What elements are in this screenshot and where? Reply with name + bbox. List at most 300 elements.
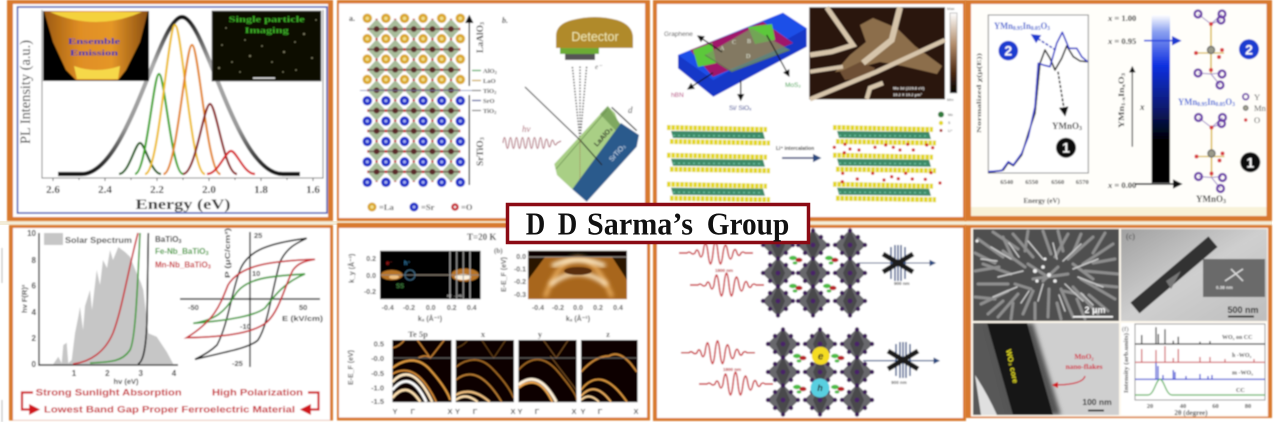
ARPES map a axes text: 0.2 [366,256,376,263]
crystal bottom [766,327,874,417]
XRD x ticks: 40 [1180,403,1186,410]
band panel titles: x [481,329,486,339]
composition formula: 3 [1121,73,1127,76]
lattice: Sr atoms [358,90,470,192]
ARPES map a axes text: 0.4 [467,305,477,312]
ARPES map a [379,250,482,300]
XRD trace: h-WO3 [1135,346,1265,362]
panel: perovskite upconversion [653,225,966,421]
legend: solar spectrum: Solar Spectrum [65,236,132,245]
loop: Fe-Nb [193,274,305,323]
badge 1: 1 [1246,154,1254,170]
k-path labels: Γ [473,407,478,416]
XRD trace: CC [1135,379,1265,395]
badge 2 in plot [998,41,1018,60]
label YMnO3 in plot: YMnO [1052,121,1079,131]
callout: Si/SiOx [729,80,752,112]
ARPES map a axes text [347,254,477,323]
polarization labels: -50 [188,303,199,312]
band energy labels: -1.0 [371,384,384,392]
temperature label: T=20 K [467,232,496,242]
input pulse 2 [690,273,764,296]
species legend: Li⁺ [948,129,953,133]
ARPES map b axes text: 0.0 [516,254,526,261]
ARPES map b axes text: E-E_F (eV) [501,257,508,292]
XRD trace labels: WO₃ on CC [1222,335,1252,341]
legend: materials: Mn-Nb_BaTiO [155,260,208,270]
badge 1 in plot: 1 [1062,140,1070,156]
LaAlO3 span bar [468,16,470,86]
XRD label f: (f) [1122,326,1128,333]
solar spectrum [53,247,173,364]
sample block [554,106,639,202]
chart: green peak [135,74,183,174]
polarization labels: 50 [299,303,307,312]
k-path labels: Γ [535,407,540,416]
intercalation arrow [776,146,820,158]
energy axis tick labels: 2.6 [46,184,60,196]
XRD x ticks: 80 [1245,403,1251,410]
composition labels [1107,13,1136,190]
stray margin mark [1,248,3,422]
intercalation arrow: Li⁺ intercalation [776,146,814,152]
wavelength label top: 1800 nm [715,268,733,273]
inset: ensemble emission: Ensemble [68,36,120,46]
atom legend: =Sr [421,202,435,212]
panel: LaAlO3 on SrTiO3 structure [337,0,650,221]
ARPES map a axes text: -0.4 [382,305,394,312]
layer labels: 2 [494,110,497,115]
ARPES map a: e⁻ [386,261,393,267]
badge 1 in plot [1056,138,1076,158]
layer labels: SrO [483,98,495,105]
input pulse 4 [699,372,773,395]
XRD trace labels: h -WO₃ [1232,353,1252,359]
XRD x ticks: 20 [1147,403,1153,410]
caption: polarization: High Polarization [212,388,303,398]
TEM core-shell image: MnO₂ [1074,352,1094,361]
composition formula: YMn [1117,110,1126,128]
output arrow top [858,262,935,264]
atom legend: =O [461,202,473,212]
loop: Mn-Nb [187,259,315,338]
species legend [938,112,953,133]
energy axis tick labels [46,184,320,196]
label doped compound: 0.95 [1013,26,1023,32]
k-path labels: X [510,407,516,416]
TEM rod image: (c) [1126,232,1135,241]
inset: single particle imaging [212,11,321,81]
XRD x ticks: 60 [1212,403,1219,410]
y axis title: PL Intensity (a.u.) [18,40,34,144]
label doped compound: 0.05 [1031,26,1041,32]
TEM rod image: 0.38 nm [1216,285,1233,290]
y tick labels: 8 [32,256,37,265]
y tick labels: 10 [27,229,37,238]
row separator band [0,221,1272,225]
ARPES map b axes text: -0.3 [514,292,526,299]
layer labels: AlO [483,68,495,75]
label LaAlO3: 3 [480,22,486,25]
k-path labels: Y [517,407,523,416]
YMnO3 caption: YMnO [1196,194,1223,204]
device schematic: B [747,39,751,45]
atom legend: Mn [1254,103,1267,113]
sample block: LaAlO₃ [593,126,614,148]
y tick labels: 2 [32,334,37,343]
ARPES map a: h⁺ [404,260,411,267]
curve: BaTiO3 [138,233,148,364]
x tick labels: 1 [72,369,77,378]
x axis title: Energy (eV) [136,197,230,213]
ARPES map b axes text [494,247,623,323]
atom legend: O [1254,115,1260,125]
title box [508,204,808,242]
ARPES map b [527,250,628,300]
band energy labels [371,340,384,406]
callout: hBN [671,73,713,99]
YMnO3 caption: 3 [1223,199,1226,205]
AFM colour bar: Min [947,97,953,102]
x tick labels [72,369,177,378]
k-path labels: X [571,407,577,416]
internal dotted red line [579,140,581,180]
layer labels: 2 [494,90,497,95]
callout: graphene [664,31,722,52]
output burst top [883,245,913,281]
molecule: doped structure [1194,11,1225,88]
layer labels: LaO [483,78,496,85]
up arrow x [1131,67,1133,147]
XRD trace: WO3 on CC [1135,327,1265,344]
composition labels: x = 1.00 [1107,13,1136,23]
y axis title: hv F(R)² [20,284,29,313]
legend: materials: Fe-Nb_BaTiO [155,247,206,256]
doped formula label: YMn [1178,97,1198,107]
inset: single particle imaging: Imaging [245,25,290,35]
panel: ARPES band structures [337,223,650,420]
ARPES map b axes text: -0.2 [552,305,564,312]
label d: d [628,105,633,115]
band panel titles: y [538,329,543,339]
blue arrow at x=0.95 [1144,40,1180,42]
doped formula label: 3 [1232,102,1235,108]
band energy labels: -0.5 [371,369,384,378]
XRD trace labels [1222,335,1253,394]
P axis title: P (μC/cm²) [223,227,232,278]
legend: materials: BaTiO [155,235,178,244]
TEM core-shell image: 100 nm [1082,397,1112,407]
polarization labels: -25 [232,359,243,368]
legend: solar spectrum [44,233,132,245]
band energy labels: -1.5 [371,397,384,406]
callout: MoS2: MoS₂ [785,82,801,89]
XRD x ticks [1147,403,1251,410]
band panel titles: Te 5p [408,329,428,339]
layer labels: 2 [495,70,498,75]
sub-panel label b: b. [502,16,508,25]
XRD plot [1121,323,1267,417]
caption: conclusion: Lowest Band Gap Proper Ferroelectric Material [44,404,295,416]
composition formula: In [1117,87,1126,97]
chart: overall envelope curve [58,17,300,174]
inset: single particle imaging: Single particle [229,14,305,24]
panel: WO3 MnO2 nanostructures [965,225,1272,418]
electron marker [812,347,830,365]
E axis title: E (kV/cm) [282,314,324,323]
polarization labels: -10 [240,322,251,331]
ARPES map b axes text: (b) [494,247,503,255]
AFM image: 19.2 X 19.2 μm² [893,92,923,97]
chart: yellow peak [145,25,205,174]
input pulse 3 [681,341,755,364]
band energy labels: -0.0 [371,354,384,363]
title box: D [558,206,577,242]
ARPES map a axes text: -0.2 [403,305,415,312]
ARPES map b axes text: -0.1 [514,266,526,274]
badge 2 in plot: 2 [1004,43,1012,59]
XRD y title: Intensity (arb.units) [1123,333,1130,393]
dashed blue arrow [1032,35,1056,50]
input pulse 1 [679,241,753,264]
badge 1 [1240,152,1260,172]
device schematic [678,13,807,97]
energy tick labels [1000,179,1089,186]
title box: D [526,206,545,242]
legend: materials: 3 [206,251,209,257]
legend: materials: 3 [178,239,181,245]
y axis title: Normalized χ(μ(E)) [976,53,983,133]
badge 2 [1239,39,1259,59]
energy axis tick labels: 1.6 [306,184,320,196]
label doped compound: In [1023,21,1031,31]
thickness marker d [612,107,637,131]
SrTiO3 span bar [468,95,470,185]
x tick labels: 3 [138,369,143,378]
k-path labels: X [633,407,639,416]
bracket arrow left [22,392,38,410]
hole marker [810,378,830,398]
composition labels: x = 0.95 [1107,36,1136,46]
band panel titles [408,329,610,339]
polarization labels: 10 [252,269,260,278]
AFM image: Mo 3d (229.8 eV) [893,86,925,90]
label x: x [1139,102,1145,112]
energy axis tick labels: 2.4 [98,184,112,196]
wavelength label bottom: 1800 nm [723,367,741,372]
y tick labels [27,229,37,369]
ARPES map b axes text: 0.0 [573,305,583,312]
TEM rod image: 500 nm [1227,305,1259,315]
device schematic: D [746,54,751,60]
panel: MoS2 device and intercalation [653,0,966,221]
hysteresis axes [180,232,320,367]
dashed black arrow [1058,72,1065,115]
energy axis tick labels: 2.0 [202,184,216,196]
x tick labels: 4 [172,369,177,378]
layer labels: TiO [483,88,494,95]
AFM colour bar [947,6,957,102]
electron paths [572,66,587,140]
label LaAlO3: LaAlO [476,25,486,53]
caption: sunlight: Strong Sunlight Absorption [36,388,182,398]
energy tick labels: 6570 [1076,179,1089,186]
ARPES map b axes text: -0.2 [514,279,526,286]
polarization labels [188,231,307,368]
legend: materials: 3 [208,264,211,270]
SEM image [972,228,1120,322]
label SrTiO3: 3 [480,137,486,140]
electron label: e⁻ [595,63,603,71]
detector: Detector [571,30,619,44]
ARPES map b axes text: kₓ (Å⁻¹) [566,314,590,323]
bracket arrow right [302,392,318,410]
XRD trace labels: m -WO₃ [1232,370,1253,376]
composition formula: 1-x [1121,97,1127,106]
ARPES map b axes text: 0.4 [613,305,623,312]
atom legend: Y [1254,92,1260,102]
x axis title: hv (eV) [113,377,139,386]
doped formula label: In [1207,97,1215,107]
loop: BaTiO3 [195,238,307,359]
TEM core-shell image: WO₃ core [1004,349,1020,384]
callout: hBN: hBN [671,92,684,99]
ARPES map a axes text: kₓ (Å⁻¹) [418,314,442,323]
label hv: hv [522,124,530,134]
ARPES map a: SS [396,284,404,290]
k-path labels: Y [580,407,586,416]
Li ions [833,143,942,185]
k-path labels: Γ [598,407,603,416]
device schematic: A [720,46,725,52]
y tick labels: 4 [32,308,37,317]
output arrow bottom [863,360,939,362]
title box: Group [707,206,789,242]
composition gradient bar [1152,15,1170,183]
lattice: La atoms [358,8,470,90]
energy axis tick labels: 1.8 [254,184,268,196]
label doped compound: 3 [1047,26,1050,32]
ARPES map a axes text: -0.2 [364,289,376,296]
energy tick labels: 6560 [1051,179,1064,186]
sub-panel label a: a. [349,14,355,23]
k-path labels: Y [392,407,398,416]
output burst bottom [888,342,918,378]
k-path labels: Γ [410,407,415,416]
ARPES map b axes text: -0.4 [532,305,544,312]
legend: materials [155,235,211,270]
SEM image: 2 μm [1084,305,1106,315]
curve: Mn-Nb [73,233,138,364]
AFM image [809,7,945,99]
label doped compound: YMn [994,21,1014,31]
ARPES map a axes text: 0.2 [447,305,457,312]
hole marker: h [817,383,823,393]
panel: BaTiO3 ferroelectric [2,225,333,422]
energy tick labels: 6540 [1000,179,1013,186]
band panel titles: z [606,329,610,339]
label YMnO3 in plot: 3 [1079,126,1082,132]
TEM core-shell image: nano-flakes [1065,362,1103,371]
doped formula label: 0.95 [1197,102,1207,108]
callout: graphene: Graphene [664,31,693,38]
band y axis title: E-E_F (eV) [348,350,355,385]
band panel: y [517,339,578,404]
curve: Fe-Nb [90,233,140,363]
lattice: octahedra network [367,19,460,182]
k-path labels: X [447,407,453,416]
composition formula: O [1117,76,1126,84]
energy tick labels: 6550 [1025,179,1038,186]
k-path labels: Y [455,407,460,416]
title box: Sarma’s [587,206,693,242]
callout: MoS2 [767,35,801,89]
y tick labels: 6 [32,282,37,290]
doped formula label: 0.05 [1215,102,1225,108]
species legend: Mo [948,113,953,117]
detector [556,17,633,60]
polarization labels: 25 [254,231,262,240]
label SrTiO3: SrTiO [476,140,486,166]
panel: PL intensity vs energy [7,0,333,221]
inset: ensemble emission: Emission [70,48,118,58]
composition labels: x = 0.00 [1107,180,1136,190]
output label bottom: 900 nm [891,380,907,385]
XRD trace: m-WO3 [1135,363,1265,379]
interface dashed line [360,90,478,92]
plot frame [988,15,1088,173]
energy axis tick labels: 2.2 [150,184,164,196]
black arrow at x=0 [1135,183,1181,185]
energy axis title: Energy (eV) [1024,197,1061,205]
device schematic: C [732,40,736,46]
photon wave [503,138,561,148]
incident/outgoing line [525,87,602,165]
atom legend [1243,92,1267,125]
species legend: S [948,121,951,125]
molecule: YMnO3 structure [1194,114,1226,192]
crystal top [761,228,867,318]
chart: orange peak [164,45,220,174]
layered MoS2 right stack [833,128,936,200]
spectrum: blue [988,32,1088,172]
atom legend: =La [379,202,395,212]
label doped compound: O [1041,21,1047,31]
layered MoS2 left stack [667,128,770,200]
reflectance axes [39,233,178,365]
band panel: Te 5p [391,339,453,404]
ticks on energy axis [53,178,313,181]
panel: YMnO3 XANES [965,0,1272,221]
band panel: x [454,339,515,404]
composition formula: x [1121,84,1127,88]
electron marker: e [818,352,824,362]
ARPES map a: #2 → #6 [447,293,463,298]
ARPES map b axes text: 0.2 [593,305,603,312]
ARPES map a axes text: 0.0 [366,273,376,280]
plot frame [42,10,323,178]
chart: red peak [207,151,255,174]
doped formula label: O [1225,97,1232,107]
badge 2: 2 [1245,41,1253,57]
atom legend [368,202,473,212]
spectrum: black [988,46,1088,173]
inset: ensemble emission [43,11,149,81]
callout: Si/SiOx: Si/ SiOₓ [729,105,752,112]
TEM core-shell image [972,322,1120,416]
XRD x title: 2θ (degree) [1174,409,1208,417]
chart: dark green peak [119,143,161,174]
